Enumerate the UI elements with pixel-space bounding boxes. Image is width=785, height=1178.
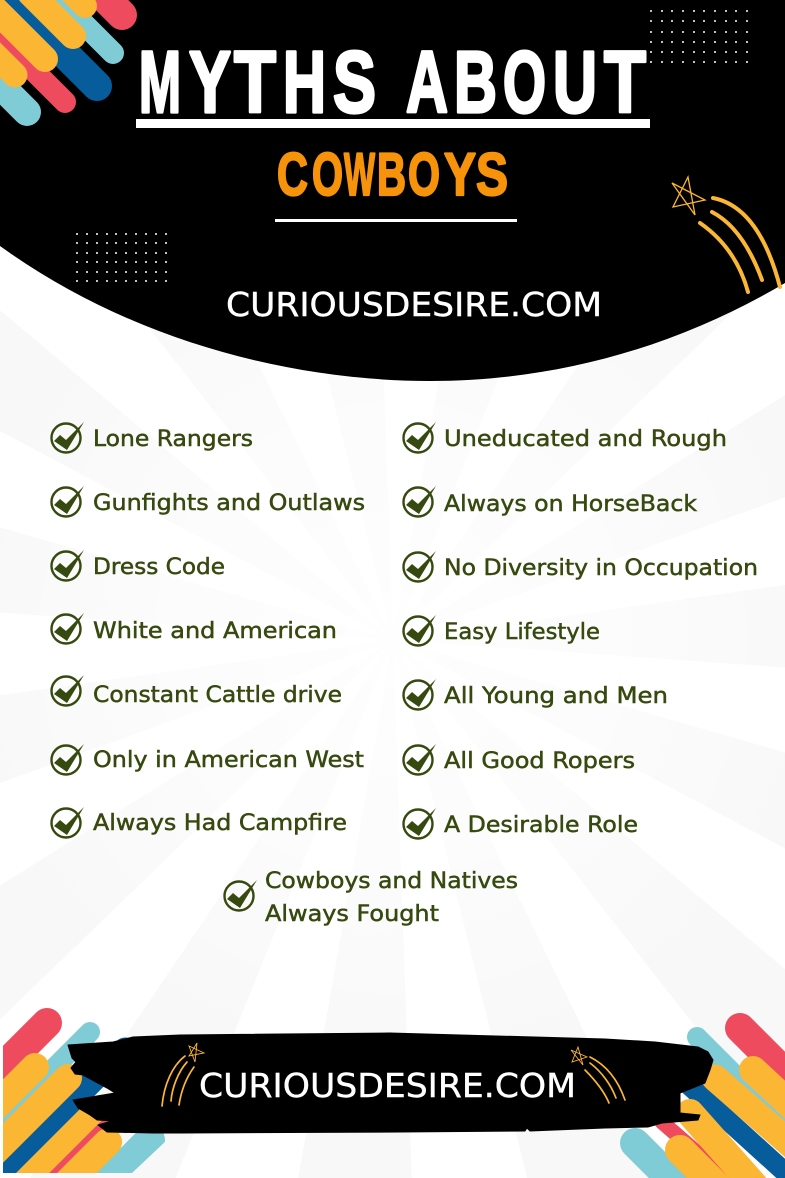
- item: always had campfire: Always Had Campfire: [93, 810, 347, 836]
- website url header: CURIOUSDESIRE.COM: [226, 285, 602, 324]
- item: white and american: White and American: [93, 618, 337, 644]
- footer: black brush banner: [68, 1033, 713, 1133]
- title: myths about: [139, 34, 646, 131]
- decoration: dot grid top right: [650, 10, 748, 63]
- item: easy lifestyle: Easy Lifestyle: [444, 619, 600, 645]
- title: myths about: S: [333, 34, 376, 131]
- decoration: coloured bars bottom right: [635, 1028, 785, 1178]
- title underline: [136, 119, 650, 128]
- item: cowboys and natives always fought: Cowboys and Natives: [265, 868, 518, 894]
- subtitle: cowboys: S: [476, 141, 508, 208]
- title: myths about: Y: [189, 34, 231, 131]
- item: always on horseback: Always on HorseBack: [444, 491, 697, 517]
- item: gunfights and outlaws: [52, 486, 365, 516]
- item: lone rangers: [52, 422, 253, 452]
- subtitle: cowboys: O: [312, 141, 343, 208]
- title: myths about: M: [139, 34, 181, 131]
- list: right column: [404, 422, 758, 838]
- item: all good ropers: [404, 744, 635, 774]
- subtitle: cowboys: C: [277, 141, 308, 208]
- subtitle: cowboys: [277, 141, 508, 208]
- icon: shooting star top right: [672, 177, 780, 292]
- title: myths about: T: [604, 34, 646, 131]
- item: all young and men: [404, 679, 668, 710]
- item: easy lifestyle: [404, 615, 600, 646]
- decoration: coloured bars top left: [0, 0, 122, 112]
- item: constant cattle drive: Constant Cattle drive: [93, 682, 342, 708]
- item: cowboys and natives always fought: Always Fought: [265, 901, 439, 927]
- subtitle: cowboys: W: [344, 141, 375, 208]
- subtitle: cowboys: O: [408, 141, 440, 208]
- title: myths about: H: [283, 34, 326, 131]
- item: uneducated and rough: [404, 422, 727, 452]
- item: constant cattle drive: [52, 675, 342, 708]
- item: white and american: [52, 613, 337, 644]
- subtitle underline: [275, 219, 517, 222]
- item: cowboys and natives always fought: [224, 868, 518, 927]
- item: dress code: [52, 550, 225, 580]
- subtitle: cowboys: B: [377, 141, 406, 208]
- item: gunfights and outlaws: Gunfights and Outlaws: [93, 490, 365, 516]
- item: always had campfire: [52, 807, 347, 838]
- icon: shooting star footer left: [162, 1043, 204, 1106]
- item: always on horseback: [404, 486, 697, 517]
- item: a desirable role: [404, 808, 638, 838]
- title: myths about: O: [503, 34, 546, 131]
- item: only in american west: [52, 744, 364, 774]
- title: myths about: U: [553, 34, 597, 131]
- title: myths about: B: [454, 34, 497, 131]
- item: only in american west: Only in American West: [93, 747, 364, 773]
- title: myths about: A: [406, 34, 448, 131]
- item: lone rangers: Lone Rangers: [93, 426, 253, 452]
- icon: shooting star footer right: [571, 1047, 625, 1103]
- item: no diversity in occupation: No Diversity in Occupation: [444, 555, 758, 581]
- item: a desirable role: A Desirable Role: [444, 812, 638, 838]
- subtitle: cowboys: Y: [444, 141, 476, 208]
- header: black curved banner: [0, 0, 785, 381]
- website url footer: CURIOUSDESIRE.COM: [199, 1066, 576, 1105]
- decoration: dot grid left: [76, 233, 167, 282]
- title: myths about: T: [234, 34, 276, 131]
- item: all young and men: All Young and Men: [444, 683, 668, 709]
- decoration: coloured bars bottom left: [0, 1023, 150, 1178]
- item: dress code: Dress Code: [93, 554, 225, 580]
- item: all good ropers: All Good Ropers: [444, 748, 635, 774]
- item: uneducated and rough: Uneducated and Rough: [444, 426, 727, 452]
- list: left column: [52, 422, 365, 838]
